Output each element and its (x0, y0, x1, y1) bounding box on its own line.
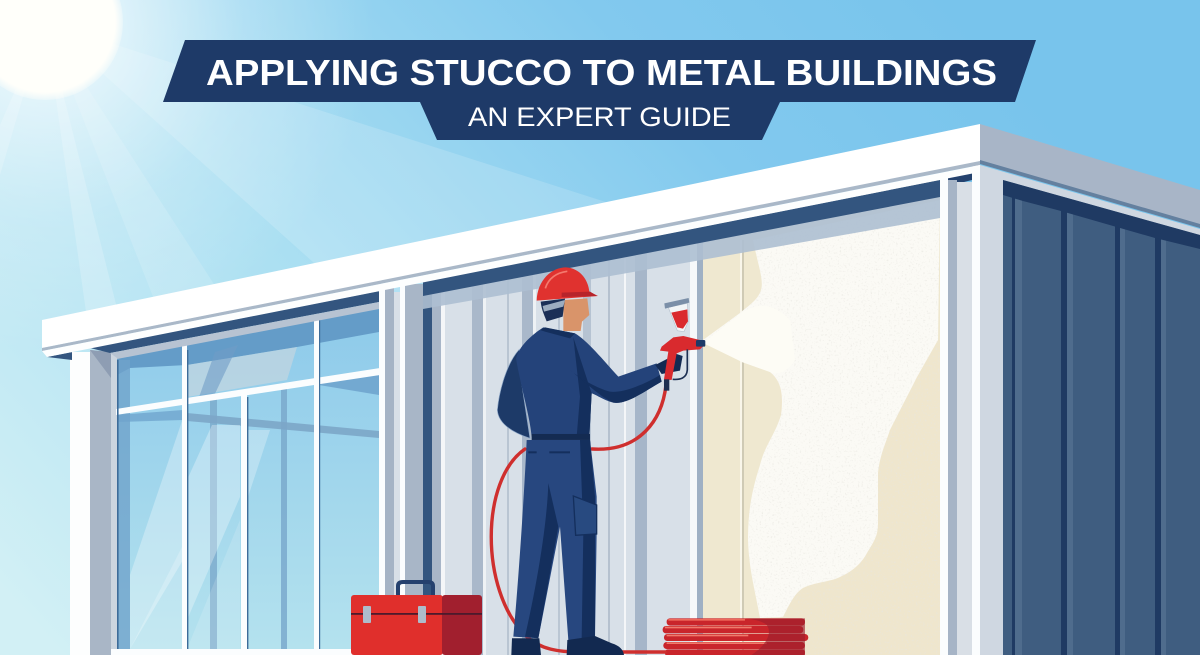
window pane edges (117, 320, 320, 649)
window sill (111, 649, 371, 655)
grey column return (90, 350, 111, 655)
neck and face (563, 298, 589, 331)
cargo pocket (573, 496, 597, 535)
white corner column (70, 352, 90, 655)
spray hose (491, 385, 666, 652)
boots (511, 638, 541, 655)
spray fan (703, 306, 795, 374)
window mullions (116, 320, 380, 649)
window glazing (117, 300, 380, 650)
worker with spray gun (497, 267, 705, 655)
jacket (516, 327, 662, 437)
spray gun (660, 298, 705, 391)
hair (541, 299, 565, 321)
tool box (351, 582, 482, 655)
soffit and shade band (47, 171, 972, 360)
corner posts (940, 165, 980, 655)
glove (655, 354, 683, 374)
white sprayed stucco patch (703, 200, 940, 618)
hard hat (537, 267, 598, 301)
corrugated metal wall (432, 225, 703, 655)
cream base coat texture (780, 340, 940, 655)
dark panels (1003, 180, 1200, 655)
banner shape (163, 40, 1036, 140)
sun with rays (0, 0, 640, 400)
title banner (163, 40, 1036, 140)
building left bay with window (70, 282, 432, 655)
belt (532, 434, 590, 440)
rear arm (497, 349, 530, 438)
trousers (513, 440, 597, 640)
window side posts (379, 282, 432, 655)
subtitle: AN EXPERT GUIDE (468, 102, 731, 132)
tool box handle (398, 582, 433, 595)
main title: APPLYING STUCCO TO METAL BUILDINGS (206, 52, 997, 93)
roof fascia (42, 124, 980, 357)
stucco coated wall (703, 178, 940, 655)
building right side (980, 124, 1200, 655)
hose coil on ground (663, 618, 808, 655)
